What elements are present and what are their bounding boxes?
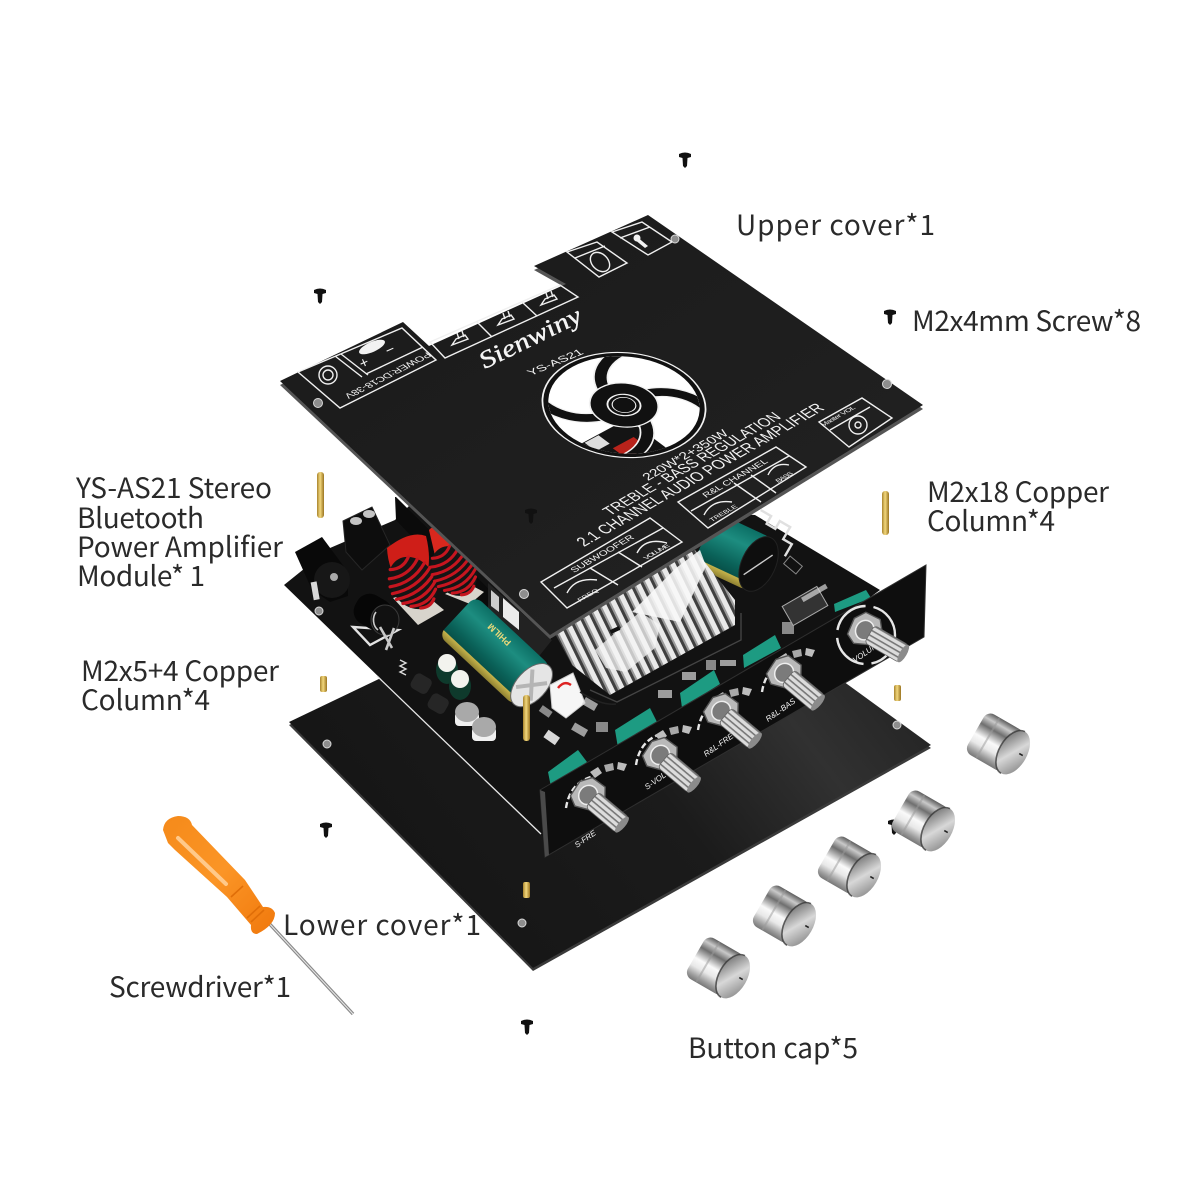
label: upper cover: Upper cover*1 (736, 204, 935, 244)
master volume box (818, 398, 892, 447)
white connector (550, 673, 616, 718)
knob shaft R&L-BAS (762, 650, 832, 717)
label: module: Bluetooth (77, 497, 204, 537)
upper cover (280, 215, 923, 639)
subwoofer box (541, 518, 682, 608)
toroid inductor left (378, 547, 448, 619)
panel labels: R&L-BAS (764, 696, 798, 724)
screwdriver (163, 816, 353, 1014)
label: module: YS-AS21 Stereo (75, 467, 272, 507)
logo: Sienwiny (473, 302, 587, 374)
spec text lines (572, 400, 828, 549)
terminal block (343, 507, 390, 570)
button cap 5 (684, 934, 757, 1004)
fan vent (542, 352, 706, 458)
label: M2x5 column: Column*4 (81, 679, 210, 719)
model name: YS-AS21 (525, 348, 586, 378)
knob shaft S-VOL (638, 732, 708, 799)
knob position wedges (590, 648, 815, 778)
R&L channel box: R&L CHANNEL (701, 457, 771, 500)
power section: + (357, 353, 372, 373)
spec text lines: 220W*2+350W (639, 427, 733, 483)
label: M2x18 column: M2x18 Copper (927, 471, 1109, 511)
subwoofer box: SUBWOOFER (569, 534, 637, 575)
screw legend (884, 310, 896, 325)
copper column right (882, 491, 889, 535)
small surface capacitors (436, 654, 496, 741)
short copper column left (320, 676, 327, 692)
panel labels: S-FRE (573, 828, 598, 850)
knob shaft VOLUME (843, 608, 915, 669)
black shielded block (395, 497, 552, 640)
knob shaft S-FRE (566, 772, 636, 839)
subwoofer box: FREQ (575, 587, 601, 603)
panel labels (573, 638, 884, 850)
label: M2x5 column: M2x5+4 Copper (81, 650, 279, 690)
label: module: Module* 1 (77, 555, 205, 595)
screw on top cover (525, 508, 537, 524)
button cap 4 (750, 882, 823, 952)
screw lower right (888, 820, 900, 835)
subwoofer box: VOLUME (641, 542, 672, 561)
R&L channel box (678, 447, 806, 528)
power section (298, 328, 436, 408)
R&L channel box: TREBLE (707, 503, 740, 523)
aux input section (612, 222, 672, 255)
lower cover (289, 546, 931, 971)
black electrolytic capacitor (349, 589, 399, 650)
R&L channel box: BASS (773, 470, 795, 484)
gold column on board (523, 695, 530, 741)
panel arc markings (566, 606, 895, 808)
screw lower left (320, 822, 332, 838)
short copper column right (894, 685, 901, 701)
label: screwdriver: Screwdriver*1 (109, 966, 291, 1006)
button cap 1 (964, 710, 1037, 780)
upper green capacitor (692, 512, 786, 597)
spec text lines: TREBLE - BASS REGULATION (599, 409, 785, 518)
spec text lines: 2.1 CHANNEL AUDIO POWER AMPLIFIER (572, 400, 828, 549)
power inductors (400, 660, 451, 716)
screw bottom (521, 1020, 533, 1035)
insulating pads (393, 582, 484, 625)
panel labels: S-VOL (643, 770, 668, 792)
silver heatsink strip behind capacitor (488, 583, 552, 660)
label: lower cover: Lower cover*1 (283, 904, 481, 944)
copper column left (317, 472, 324, 518)
power section: POWER:DC18-38V (341, 350, 433, 400)
screw top left (314, 288, 326, 304)
label: screw: M2x4mm Screw*8 (912, 300, 1141, 340)
button cap 3 (815, 833, 888, 903)
board chip clusters (539, 510, 828, 745)
label: M2x5 column (81, 650, 279, 719)
panel labels: VOLUME (851, 638, 884, 665)
power section: − (383, 340, 398, 360)
label: module (75, 467, 283, 595)
DC power jack (295, 537, 350, 602)
label: module: Power Amplifier (77, 526, 283, 566)
bluetooth input section (567, 242, 627, 277)
screw top center (679, 152, 691, 168)
label: M2x18 column (927, 471, 1109, 540)
toroid inductor right (421, 537, 487, 605)
teal rotary switches (548, 590, 871, 792)
label: M2x18 column: Column*4 (927, 500, 1055, 540)
label: button cap: Button cap*5 (688, 1027, 858, 1067)
red film capacitors (387, 527, 452, 590)
short copper column bottom (523, 882, 530, 898)
speaker terminals section (430, 285, 578, 358)
master volume box: Master VOL (818, 404, 857, 428)
heatsink (553, 550, 741, 702)
front control panel (540, 565, 926, 857)
panel labels: R&L-FRE (702, 731, 736, 759)
big green capacitor: PHILM (486, 621, 513, 648)
amplifier module circuit board (284, 495, 880, 838)
knob shaft R&L-FRE (699, 688, 769, 755)
button cap 2 (889, 787, 962, 857)
big green capacitor (439, 596, 561, 715)
